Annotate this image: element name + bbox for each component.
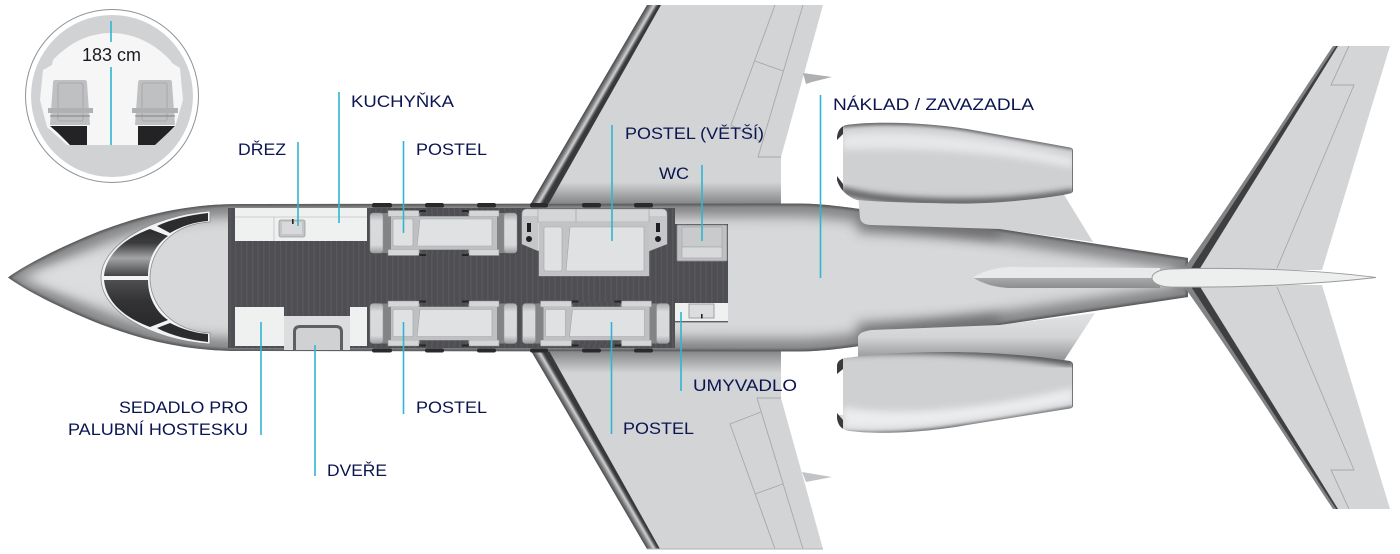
divan lower right: [522, 300, 670, 346]
horizontal stabiliser upper: [1183, 46, 1390, 270]
callout: postel lower left: POSTEL: [416, 398, 487, 417]
window: lower main: [104, 280, 168, 327]
cockpit windshield: [101, 211, 210, 344]
wing flap fairing lower: [802, 472, 832, 482]
callout: kuchyňka: [339, 92, 455, 223]
lower wing: [530, 349, 823, 549]
callout: postel upper left: [404, 140, 487, 233]
callout: postel lower left: [404, 322, 487, 417]
callout: dveře: DVEŘE: [327, 461, 387, 480]
callout: kuchyňka: KUCHYŇKA: [351, 92, 455, 111]
wing flap fairing upper: [803, 73, 832, 84]
large bed / sofa: [522, 209, 667, 276]
height dimension line: [110, 21, 112, 145]
window: top small: [157, 213, 208, 233]
callout: postel větší: POSTEL (VĚTŠÍ): [625, 124, 764, 143]
callout: sedadlo pro palubní hostesku: [68, 322, 261, 439]
callout: postel upper left: POSTEL: [416, 140, 487, 159]
vertical fin: [1152, 268, 1376, 287]
right seat: [132, 80, 178, 145]
callout: umyvadlo: [681, 312, 797, 395]
callout: wc: WC: [659, 164, 689, 183]
callout: sedadlo pro palubní hostesku: SEDADLO PRO: [119, 398, 248, 417]
callout: dřez: [238, 140, 298, 226]
cabin interior shape: [40, 33, 183, 145]
window: bottom small: [157, 323, 208, 342]
lower engine: [835, 349, 1075, 434]
WC: [677, 225, 727, 261]
callout: náklad / zavazadla: NÁKLAD / ZAVAZADLA: [833, 95, 1035, 114]
flight attendant seat: [235, 307, 284, 346]
lower engine pylon: [858, 313, 1095, 362]
dorsal fairing: [973, 267, 1160, 288]
upper engine pylon: [858, 193, 1093, 242]
left seat: [48, 80, 93, 145]
callout: sedadlo pro palubní hostesku: PALUBNÍ HOSTESKU: [68, 420, 248, 439]
callout: postel lower right: POSTEL: [623, 419, 694, 438]
callout: dřez: DŘEZ: [238, 140, 286, 159]
horizontal stabiliser lower: [1183, 285, 1390, 509]
galley sink: [279, 219, 305, 237]
galley counter: [235, 208, 367, 241]
cabin height cross-section circle: [26, 10, 198, 182]
callout: wc: [659, 164, 702, 241]
washbasin: [675, 303, 728, 322]
cabin floor: [228, 208, 728, 348]
window: upper main: [104, 229, 168, 276]
fuselage windows: [372, 203, 653, 352]
upper engine: [835, 122, 1075, 204]
callout: umyvadlo: UMYVADLO: [693, 376, 797, 395]
fuselage: [8, 204, 1188, 352]
callout: postel lower right: [612, 322, 694, 438]
height label: 183 cm: [82, 45, 141, 65]
divan upper left: [370, 210, 517, 256]
callout: dveře: [315, 345, 387, 480]
upper wing: [530, 5, 823, 206]
door area: [284, 307, 367, 350]
divan lower left: [370, 300, 517, 346]
